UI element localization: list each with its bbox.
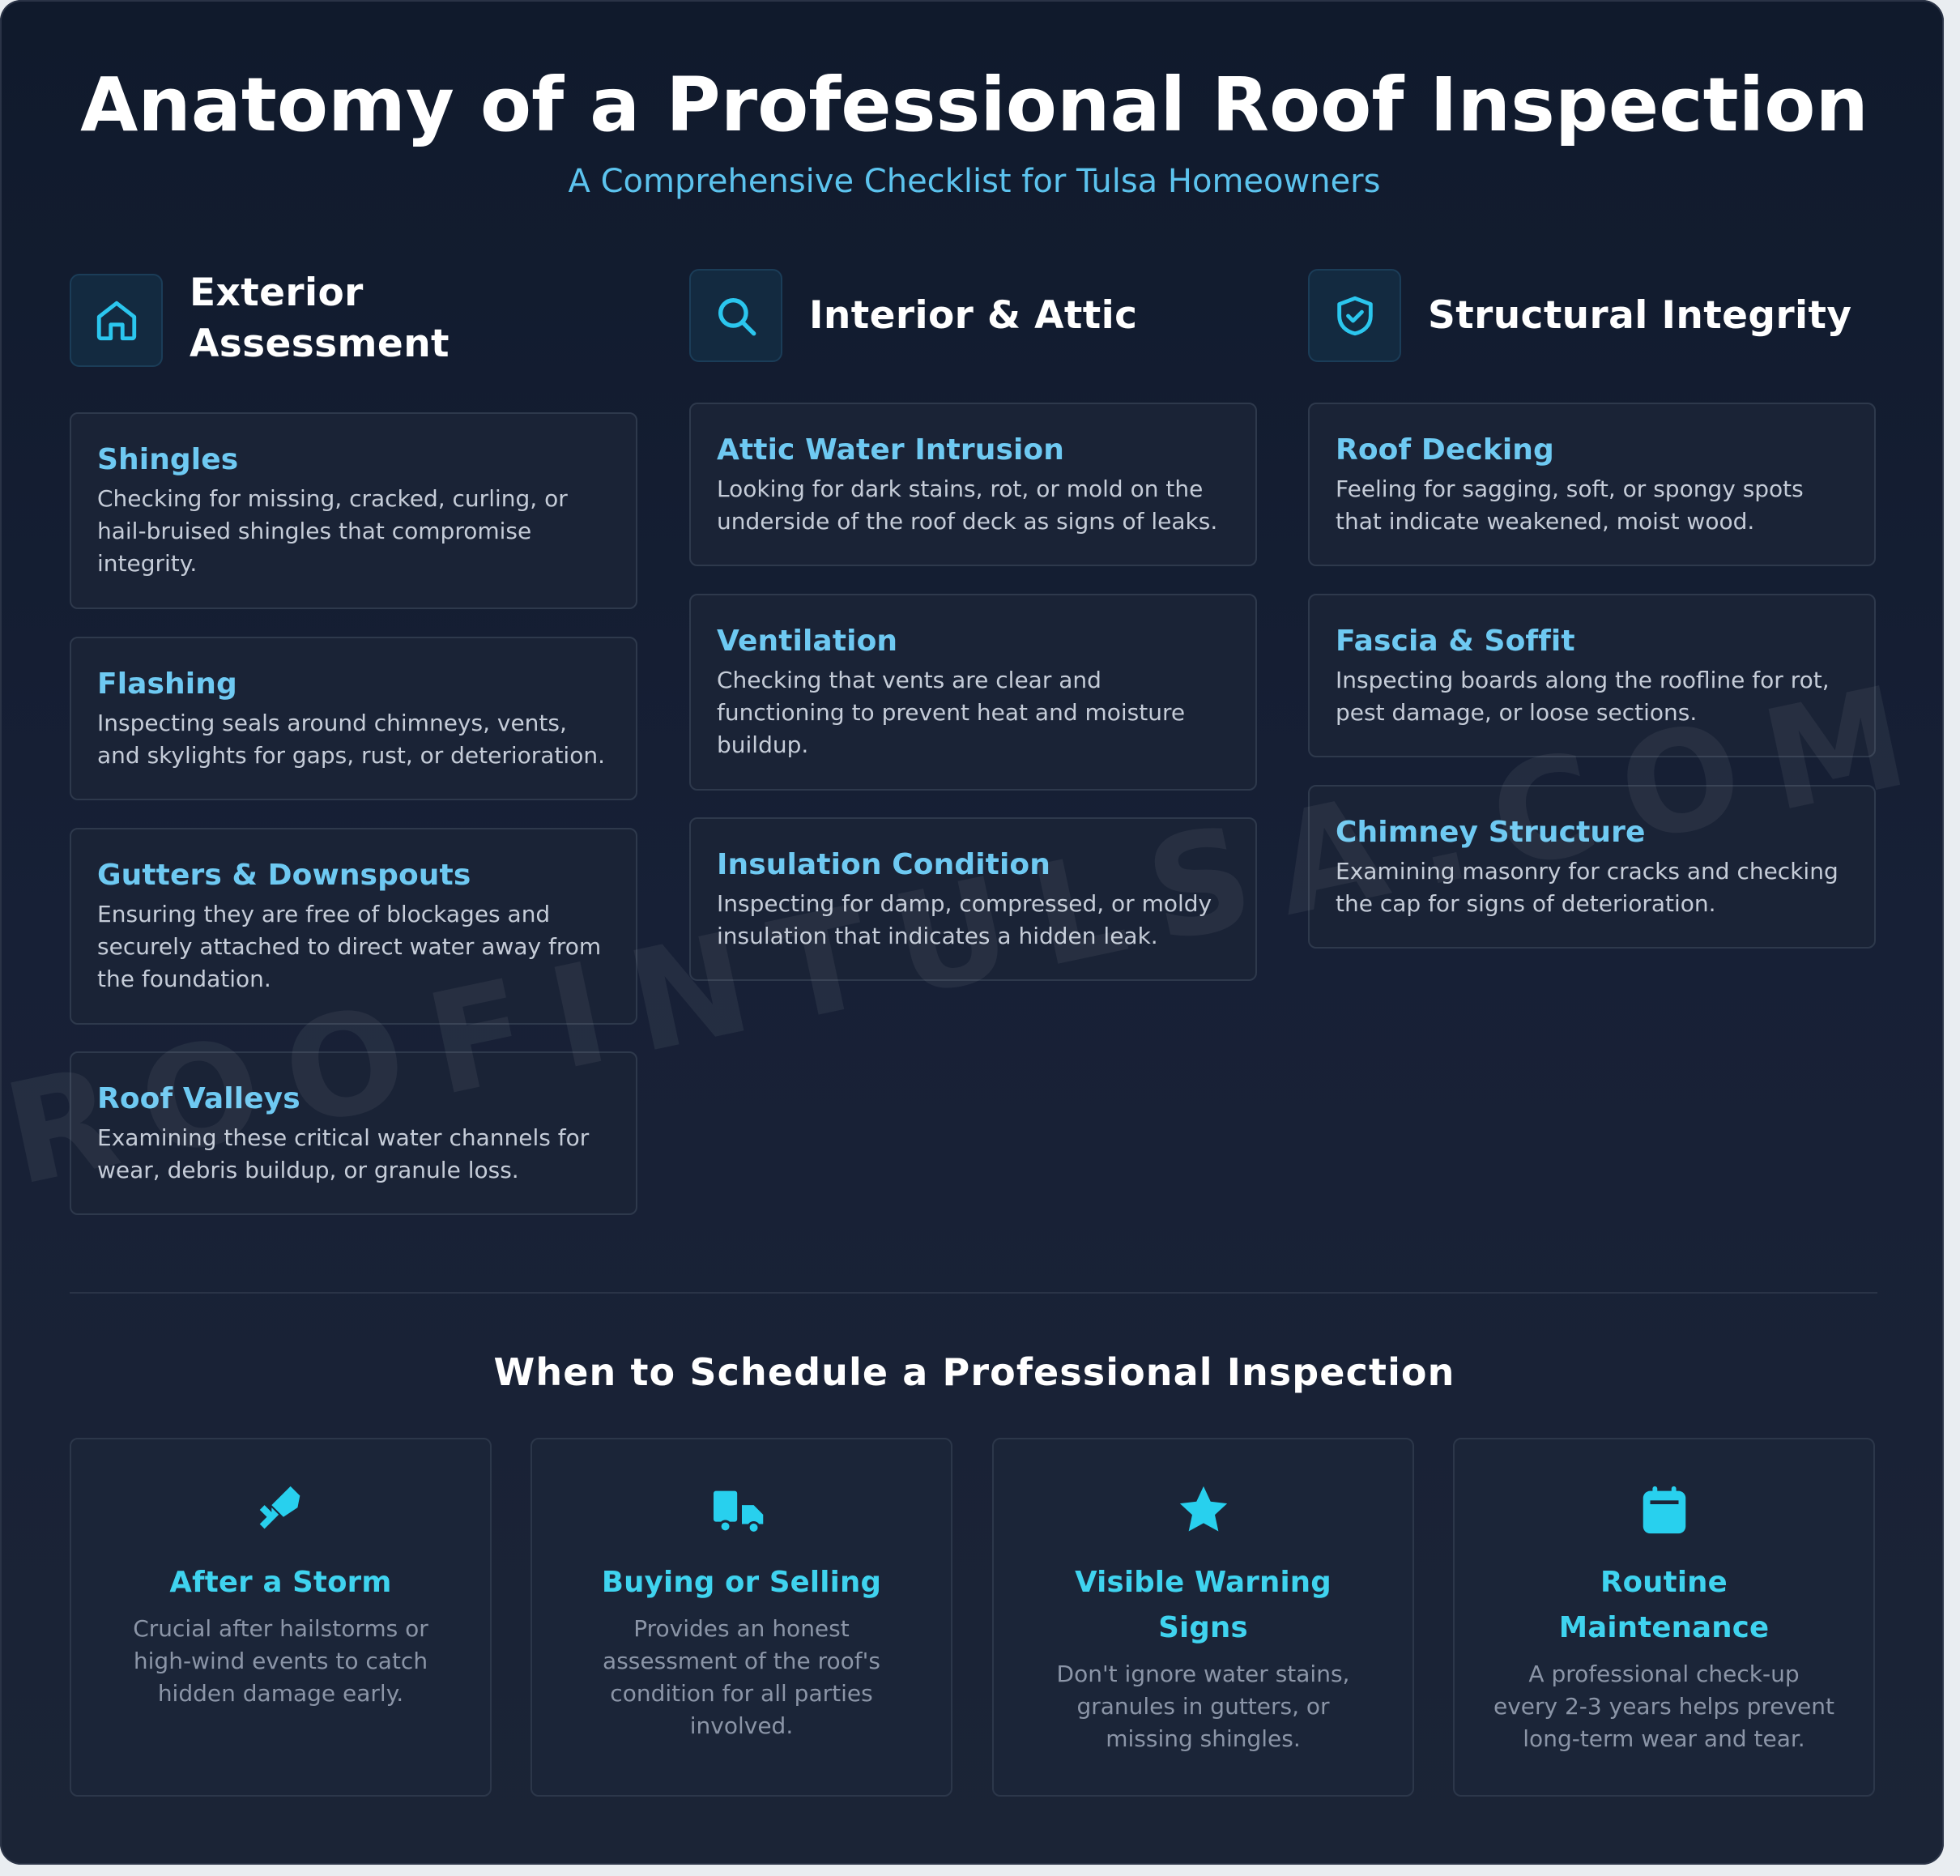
card: after storm bbox=[70, 1438, 492, 1797]
card: routine bbox=[1453, 1438, 1875, 1797]
icon: house bbox=[70, 274, 163, 367]
card: after storm: high-wind events to catch bbox=[134, 1648, 428, 1674]
card: decking: that indicate weakened, moist wood. bbox=[1336, 508, 1754, 535]
card: routine: long-term wear and tear. bbox=[1523, 1725, 1805, 1752]
card: ventilation: functioning to prevent heat and moisture bbox=[717, 699, 1185, 726]
heading: exterior: Assessment bbox=[190, 322, 450, 366]
card: attic water: Attic Water Intrusion bbox=[717, 433, 1064, 467]
card: valleys: Examining these critical water channels for bbox=[97, 1124, 589, 1151]
card: ventilation bbox=[689, 594, 1257, 791]
card: warning signs: granules in gutters, or bbox=[1076, 1693, 1330, 1720]
card: buying selling: assessment of the roof's bbox=[603, 1648, 880, 1674]
card: decking bbox=[1308, 403, 1876, 566]
card: warning signs bbox=[992, 1438, 1414, 1797]
card: buying selling: Buying or Selling bbox=[602, 1566, 881, 1599]
card: buying selling bbox=[530, 1438, 952, 1797]
card: gutters: securely attached to direct water away from bbox=[97, 933, 601, 960]
card: chimney: the cap for signs of deterioration. bbox=[1336, 890, 1716, 917]
card: shingles: integrity. bbox=[97, 550, 197, 577]
card: routine: Routine bbox=[1600, 1566, 1728, 1599]
card: flashing bbox=[70, 637, 637, 800]
main panel: ROOFINTULSA.COM bbox=[0, 649, 1944, 1217]
column header: interior bbox=[689, 269, 1137, 362]
card: valleys: wear, debris buildup, or granule loss. bbox=[97, 1157, 519, 1183]
card: insulation: insulation that indicates a hidden leak. bbox=[717, 923, 1158, 949]
column header: exterior bbox=[70, 271, 450, 367]
card: after storm: Crucial after hailstorms or bbox=[133, 1615, 428, 1642]
section heading: When to Schedule a Professional Inspection bbox=[494, 1350, 1455, 1394]
card: routine: Maintenance bbox=[1559, 1611, 1769, 1644]
title: Anatomy of a Professional Roof Inspection bbox=[80, 62, 1868, 148]
card: shingles: Shingles bbox=[97, 443, 238, 476]
card: decking: Feeling for sagging, soft, or spongy spots bbox=[1336, 475, 1804, 502]
heading: interior: Interior & Attic bbox=[809, 293, 1137, 338]
card: attic water bbox=[689, 403, 1257, 566]
heading: structural: Structural Integrity bbox=[1428, 293, 1851, 338]
heading: exterior: Exterior bbox=[190, 271, 364, 315]
card: attic water: underside of the roof deck as signs of leaks. bbox=[717, 508, 1217, 535]
card: after storm: hidden damage early. bbox=[158, 1680, 403, 1707]
icon: calendar bbox=[1643, 1486, 1686, 1534]
card: shingles bbox=[70, 412, 637, 609]
card: chimney: Chimney Structure bbox=[1336, 816, 1646, 849]
card: warning signs: missing shingles. bbox=[1106, 1725, 1301, 1752]
card: ventilation: buildup. bbox=[717, 731, 808, 758]
icon: star bbox=[1179, 1486, 1228, 1531]
card: buying selling: involved. bbox=[690, 1712, 793, 1739]
card: gutters: Gutters & Downspouts bbox=[97, 859, 471, 892]
card: routine: A professional check-up bbox=[1528, 1661, 1800, 1687]
card: warning signs: Don't ignore water stains, bbox=[1057, 1661, 1349, 1687]
card: chimney: Examining masonry for cracks and checking bbox=[1336, 858, 1839, 885]
card: flashing: Flashing bbox=[97, 667, 237, 701]
card: flashing: and skylights for gaps, rust, or deterioration. bbox=[97, 742, 605, 769]
card: fascia: pest damage, or loose sections. bbox=[1336, 699, 1697, 726]
card: routine: every 2-3 years helps prevent bbox=[1493, 1693, 1834, 1720]
subtitle: A Comprehensive Checklist for Tulsa Homeowners bbox=[569, 163, 1380, 200]
card: warning signs: Signs bbox=[1158, 1611, 1248, 1644]
card: gutters: the foundation. bbox=[97, 966, 271, 992]
card: insulation bbox=[689, 817, 1257, 981]
card: buying selling: condition for all parties bbox=[610, 1680, 873, 1707]
icon: hammer bbox=[259, 1486, 300, 1529]
icon: magnifier bbox=[689, 269, 782, 362]
column header: structural bbox=[1308, 269, 1851, 362]
icon: truck bbox=[713, 1490, 763, 1532]
card: attic water: Looking for dark stains, rot, or mold on the bbox=[717, 475, 1203, 502]
card: insulation: Inspecting for damp, compressed, or moldy bbox=[717, 890, 1212, 917]
card: gutters bbox=[70, 828, 637, 1025]
card: fascia: Inspecting boards along the roofline for rot, bbox=[1336, 667, 1830, 693]
card: fascia: Fascia & Soffit bbox=[1336, 625, 1575, 658]
card: insulation: Insulation Condition bbox=[717, 848, 1050, 881]
card: ventilation: Checking that vents are clear and bbox=[717, 667, 1101, 693]
card: chimney bbox=[1308, 785, 1876, 949]
card: valleys: Roof Valleys bbox=[97, 1082, 300, 1115]
card: shingles: Checking for missing, cracked, curling, or bbox=[97, 485, 568, 512]
card: decking: Roof Decking bbox=[1336, 433, 1554, 467]
card: buying selling: Provides an honest bbox=[633, 1615, 850, 1642]
card: valleys bbox=[70, 1051, 637, 1215]
card: ventilation: Ventilation bbox=[717, 625, 897, 658]
card: flashing: Inspecting seals around chimneys, vents, bbox=[97, 710, 567, 736]
card: after storm: After a Storm bbox=[169, 1566, 392, 1599]
icon: shield bbox=[1308, 269, 1401, 362]
card: warning signs: Visible Warning bbox=[1075, 1566, 1332, 1599]
card: fascia bbox=[1308, 594, 1876, 757]
card: shingles: hail-bruised shingles that compromise bbox=[97, 518, 531, 544]
heading: exterior bbox=[190, 271, 450, 366]
card: gutters: Ensuring they are free of blockages and bbox=[97, 901, 550, 927]
